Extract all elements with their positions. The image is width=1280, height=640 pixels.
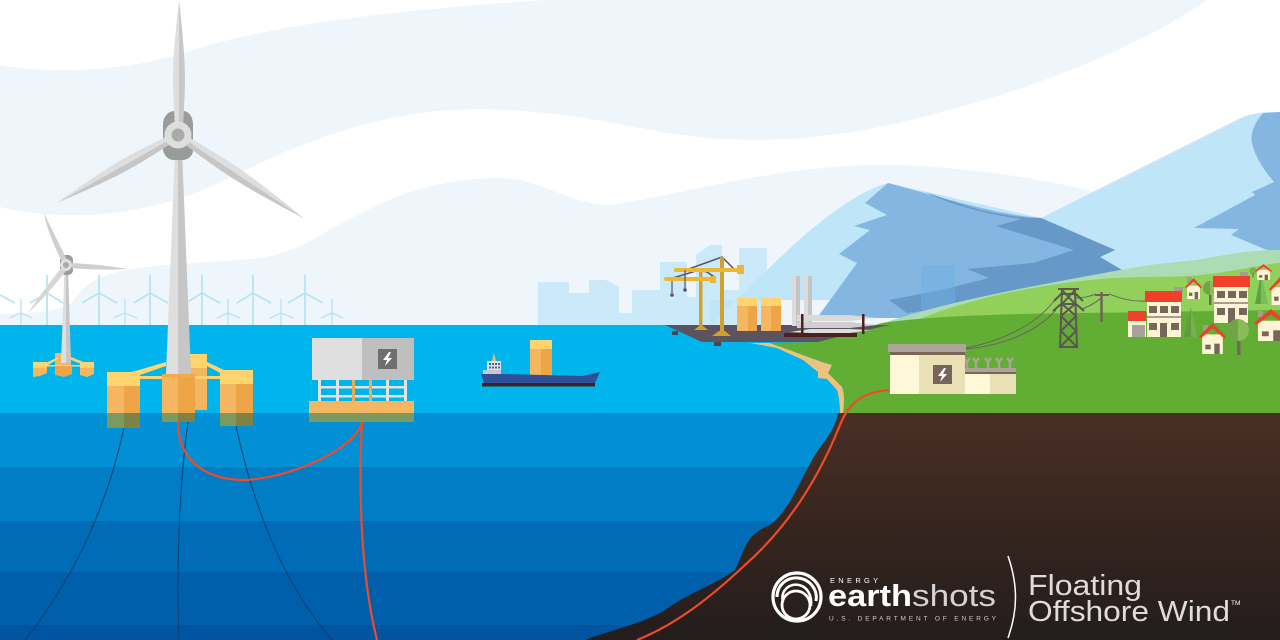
small wind turbine <box>28 213 128 363</box>
heading: Floating Offshore Wind: Offshore Wind <box>1028 596 1230 628</box>
port dock <box>665 325 890 346</box>
apartment house B <box>1213 272 1250 323</box>
heading: Floating Offshore Wind: Floating <box>1028 570 1142 602</box>
logo: Energy Earthshots: ENERGY <box>830 576 881 585</box>
transmission pylon <box>1053 289 1084 347</box>
icon: lightning bolt <box>933 365 952 384</box>
offshore substation <box>309 338 414 422</box>
logo: Energy Earthshots <box>773 573 997 622</box>
stored tower sections and blades <box>784 276 877 337</box>
beach <box>750 343 844 413</box>
front houses and tree <box>1199 309 1280 355</box>
small houses back <box>1185 264 1280 305</box>
city skyline <box>538 245 767 325</box>
port cranes <box>664 257 744 336</box>
utility pole <box>1095 292 1109 322</box>
sky background <box>0 0 1280 330</box>
seabed ground <box>585 413 1280 640</box>
green hills <box>770 250 1280 413</box>
icon: swirl <box>773 573 821 621</box>
heading: Floating Offshore Wind <box>1028 570 1240 628</box>
onshore substation <box>888 344 1016 394</box>
logo: Energy Earthshots: U.S. DEPARTMENT OF ENERGY <box>829 616 997 622</box>
red power cables <box>178 390 889 640</box>
logo: Energy Earthshots: earth <box>828 578 912 613</box>
icon: lightning bolt <box>378 349 397 369</box>
deep sea bands <box>0 413 860 640</box>
mountains <box>710 112 1280 325</box>
large floating turbine platform <box>107 354 253 428</box>
storage tanks <box>737 298 781 331</box>
logo divider <box>1008 556 1016 638</box>
logo: Energy Earthshots: shots <box>912 578 996 613</box>
offshore wind farm silhouettes <box>0 275 343 325</box>
mooring lines <box>25 422 332 640</box>
large wind turbine <box>54 0 308 374</box>
sea surface <box>0 325 860 413</box>
cargo ship <box>481 340 600 386</box>
village <box>1128 264 1280 355</box>
transmission wires <box>966 294 1146 349</box>
apartment house A <box>1128 287 1183 337</box>
trees <box>1184 268 1268 337</box>
small turbine platform <box>33 353 94 377</box>
heading: Floating Offshore Wind: TM <box>1231 600 1240 607</box>
